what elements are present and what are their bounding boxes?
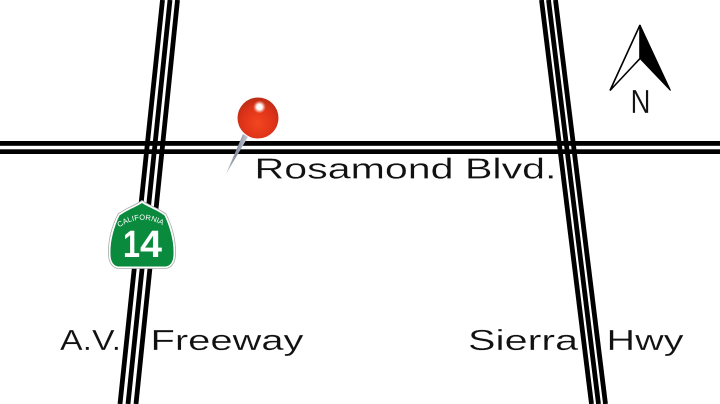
label: A.V. Freeway (60, 325, 304, 357)
road: Rosamond Blvd (0, 141, 720, 154)
shield text: CALIFORNIA: CALIFORNIA (118, 214, 163, 226)
north label: N (630, 83, 650, 120)
label: Rosamond Blvd.: Rosamond Blvd. (254, 154, 556, 186)
shield number: 14: 1 (123, 224, 140, 266)
label: A.V. Freeway: A.V. (60, 325, 121, 357)
road: A.V. Freeway (120, 0, 178, 404)
icon: California route 14 shield (108, 200, 176, 269)
shield number: 14 (123, 224, 162, 266)
label: Sierra Hwy: Hwy (606, 325, 684, 357)
icon: map pin (226, 98, 278, 174)
shield number: 14: 4 (140, 224, 162, 266)
road: Sierra Hwy (542, 0, 606, 404)
icon: north arrow (610, 25, 670, 120)
label: A.V. Freeway: Freeway (150, 325, 304, 357)
label: Sierra Hwy: Sierra (468, 325, 579, 357)
label: Sierra Hwy (468, 325, 684, 357)
